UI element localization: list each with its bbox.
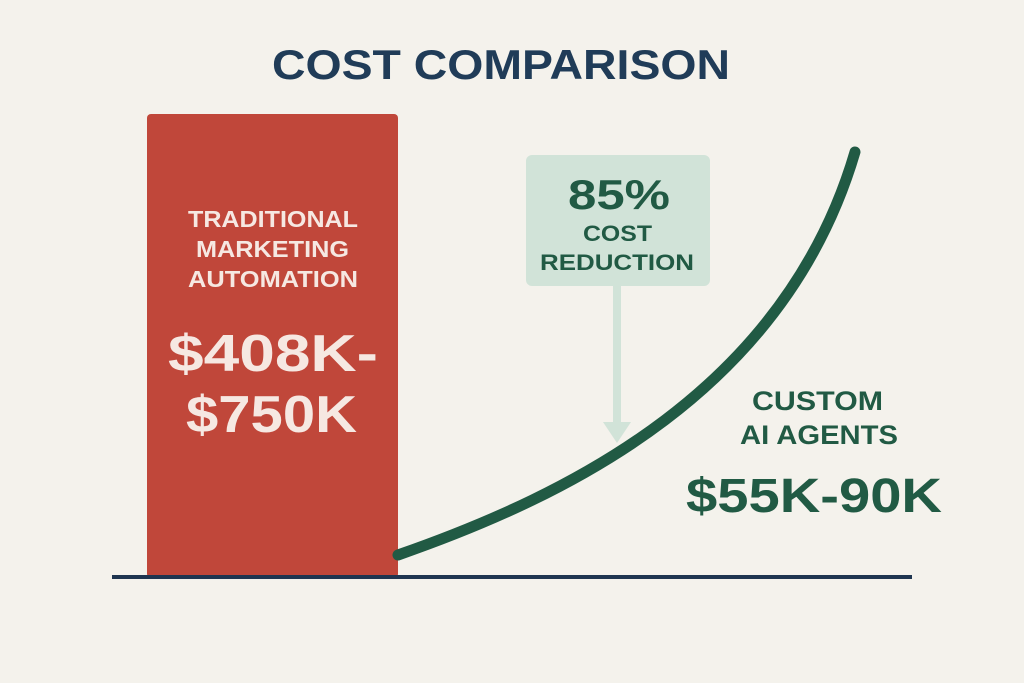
callout: 85% cost reduction: COST [583,221,653,246]
chart: growth curve [398,152,855,555]
text: custom AI agents: CUSTOM [752,386,883,416]
text: custom AI agents: AI AGENTS [740,420,898,450]
text: traditional label: MARKETING [196,236,349,262]
panel: traditional bar [147,114,398,578]
text: custom AI agents [686,386,942,523]
callout: 85% cost reduction: 85% [568,171,670,218]
text: traditional price: $750K [186,386,357,444]
title: COST COMPARISON [272,41,730,88]
callout: 85% cost reduction: REDUCTION [540,250,694,275]
text: traditional label: TRADITIONAL [188,206,358,232]
callout: 85% cost reduction [526,155,710,286]
text: ai price: $55K-90K [686,470,942,523]
text: traditional price: $408K- [168,325,378,383]
text: traditional price [168,325,378,444]
text: traditional label: AUTOMATION [188,266,358,292]
text: traditional label [188,206,358,292]
axis baseline [112,575,912,579]
arrow: down [603,286,631,443]
